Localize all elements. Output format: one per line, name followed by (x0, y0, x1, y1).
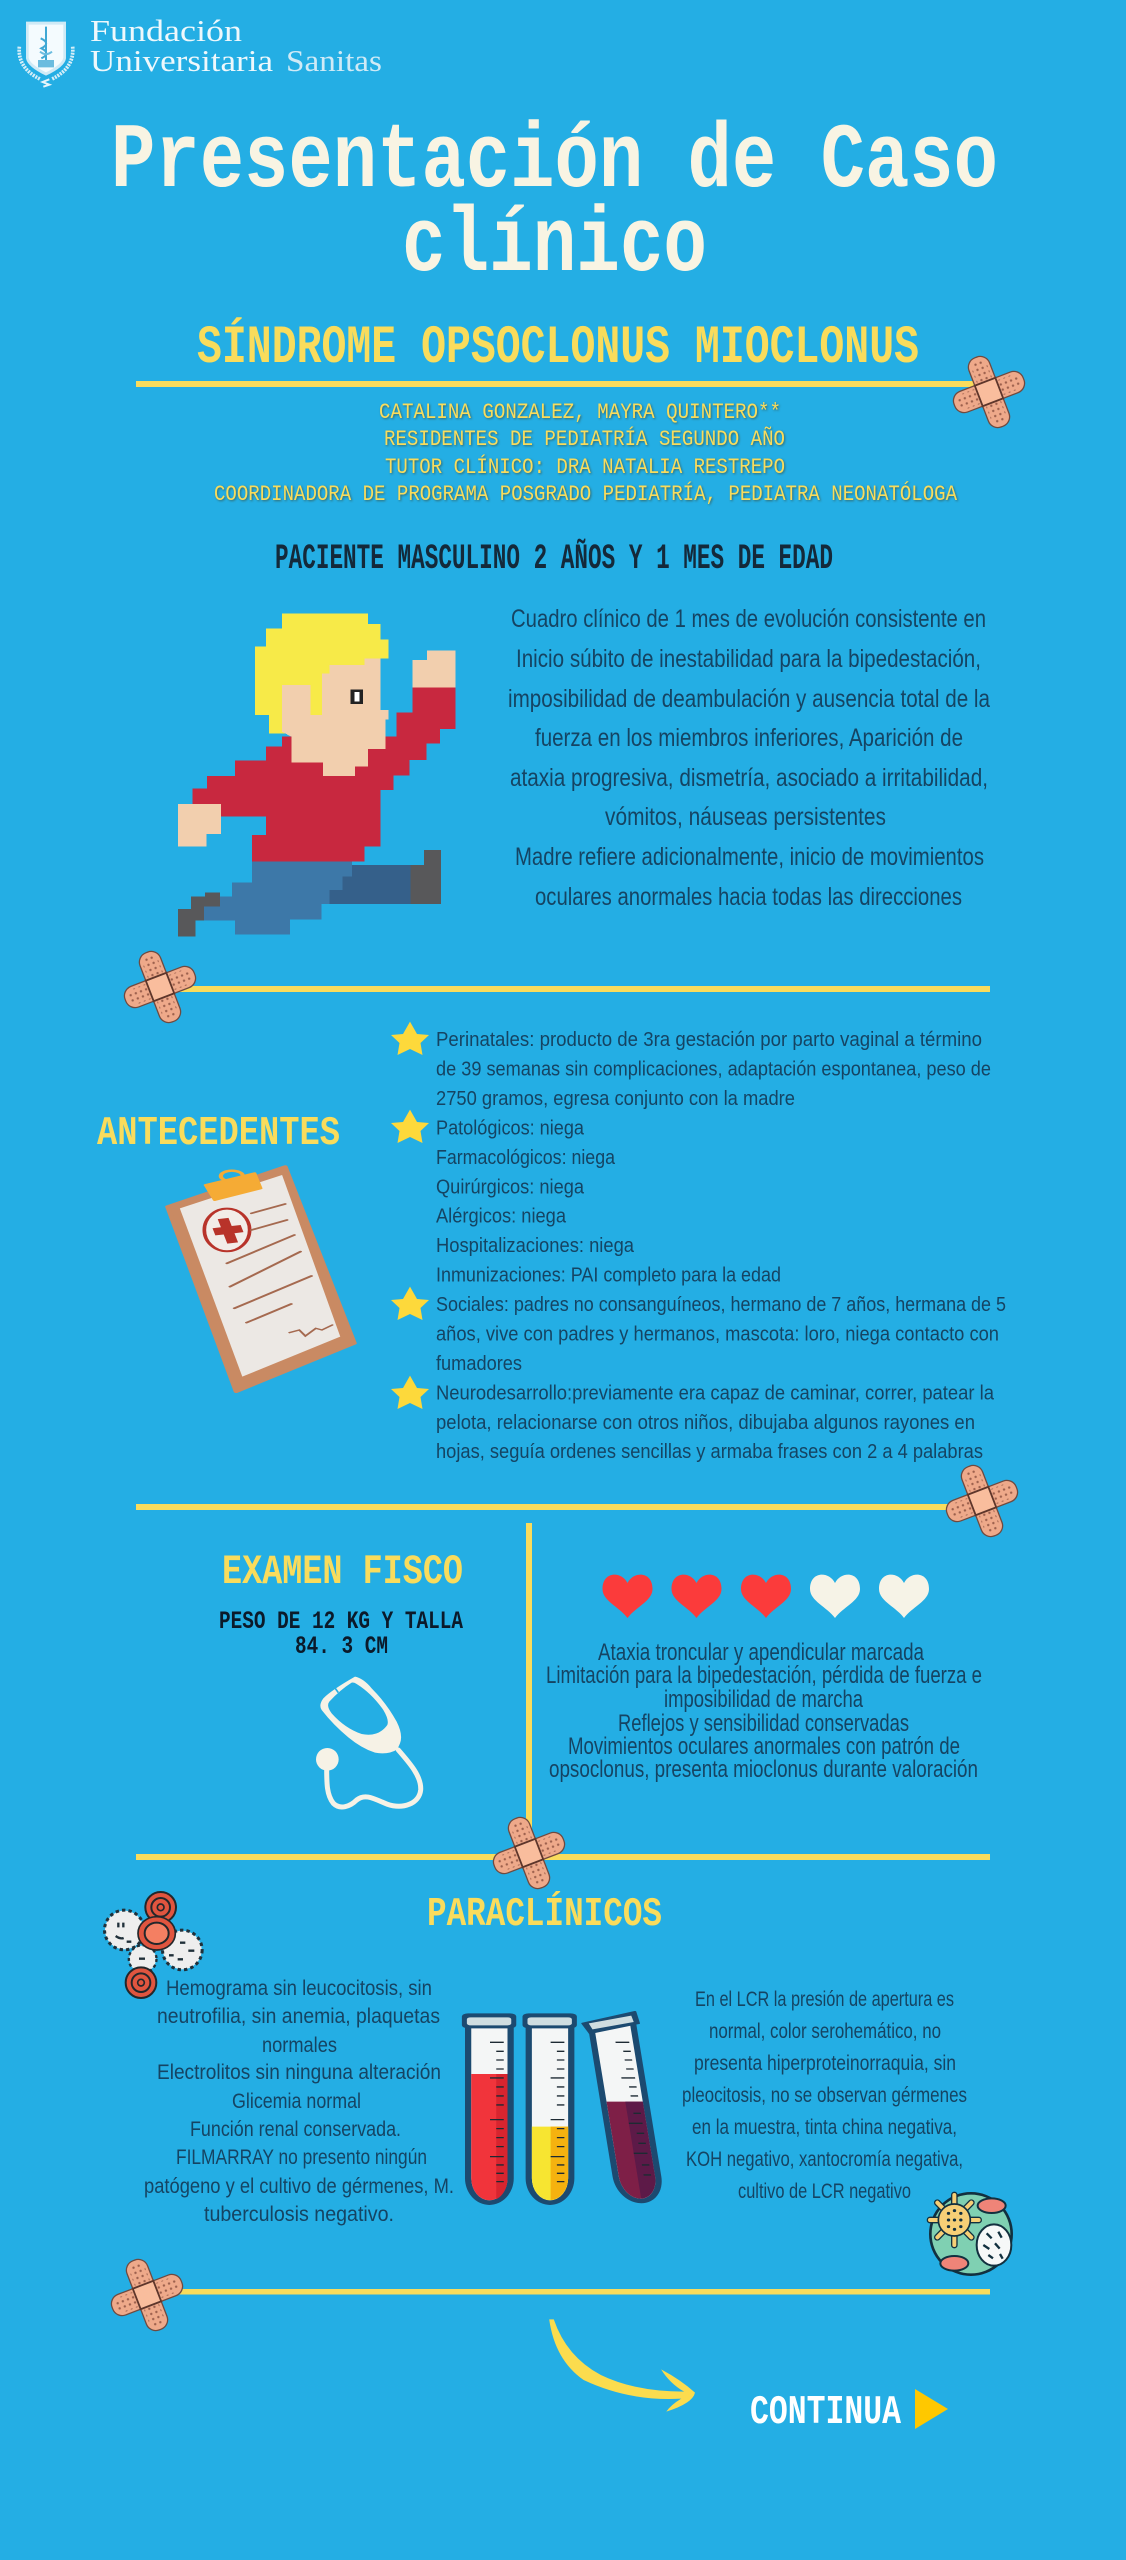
title (111, 109, 998, 298)
antecedentes text: de 39 semanas sin complicaciones, adaptación espontanea, peso de (436, 1058, 991, 1080)
heading: antecedentes: ANTECEDENTES (97, 1111, 340, 1157)
subtitle: SÍNDROME OPSOCLONUS MIOCLONUS (197, 317, 919, 379)
right lab results text: normal, color serohemático, no (709, 2020, 941, 2043)
patient description text: Madre refiere adicionalmente, inicio de movimientos (515, 843, 984, 871)
icon: clipboard (168, 1167, 354, 1392)
left lab results text: Electrolitos sin ninguna alteración (157, 2061, 441, 2084)
right lab results text: presenta hiperproteinorraquia, sin (694, 2052, 956, 2075)
authors: RESIDENTES DE PEDIATRÍA SEGUNDO AÑO (384, 426, 785, 452)
antecedentes text: Hospitalizaciones: niega (436, 1235, 635, 1257)
icon: germs circle (930, 2193, 1012, 2275)
right lab results text (682, 1988, 967, 2203)
right lab results text: En el LCR la presión de apertura es (695, 1988, 954, 2011)
antecedentes text: Quirúrgicos: niega (436, 1176, 585, 1198)
divider with bandage 1 (136, 344, 1037, 440)
right lab results text: en la muestra, tinta china negativa, (692, 2116, 957, 2139)
left lab results text: FILMARRAY no presento ningún (176, 2146, 427, 2169)
left lab results text: Función renal conservada. (190, 2118, 401, 2141)
left lab results text: neutrofilia, sin anemia, plaquetas (157, 2005, 440, 2028)
left lab results text (144, 1977, 454, 2226)
antecedentes text: Farmacológicos: niega (436, 1147, 616, 1169)
physical exam text: Ataxia troncular y apendicular marcada (598, 1639, 925, 1666)
red cells (126, 1892, 176, 1998)
patient description text: Cuadro clínico de 1 mes de evolución consistente en (511, 605, 986, 633)
icon: bandage (99, 2247, 195, 2343)
physical exam text: Movimientos oculares anormales con patrón de (568, 1733, 960, 1760)
patient description text (508, 605, 990, 911)
icon: bandage (934, 1453, 1030, 1549)
list: antecedentes (391, 1022, 1006, 1463)
icon: bandage (481, 1805, 577, 1901)
logo text (90, 13, 382, 78)
icon: stethoscope (316, 1677, 421, 1807)
patient description text: vómitos, náuseas persistentes (605, 803, 886, 831)
antecedentes text: pelota, relacionarse con otros niños, dibujaba algunos rayones en (436, 1412, 975, 1434)
vertical divider (526, 1523, 532, 1858)
weight and height: 84. 3 CM (295, 1632, 388, 1661)
authors (214, 400, 958, 507)
arrow (549, 2319, 695, 2412)
antecedentes text (436, 1029, 1006, 1463)
white cells (105, 1911, 202, 1972)
antecedentes text: Patológicos: niega (436, 1117, 585, 1139)
tube: dark red (582, 2012, 666, 2203)
icon: star 3 (391, 1287, 429, 1320)
patient description text: fuerza en los miembros inferiores, Aparición de (535, 724, 963, 752)
patient description text: Inicio súbito de inestabilidad para la bipedestación, (516, 645, 981, 673)
logo text: Sanitas (286, 43, 382, 78)
left lab results text: tuberculosis negativo. (204, 2203, 394, 2226)
divider with bandage 5 (99, 2247, 990, 2343)
physical exam text: Limitación para la bipedestación, pérdida de fuerza e (546, 1662, 982, 1689)
antecedentes text: Perinatales: producto de 3ra gestación por parto vaginal a término (436, 1029, 982, 1051)
icon: university shield (19, 22, 73, 87)
left lab results text: patógeno y el cultivo de gérmenes, M. (144, 2175, 454, 2198)
patient heading: PACIENTE MASCULINO 2 AÑOS Y 1 MES DE EDAD (275, 539, 833, 579)
icon: bandage (941, 344, 1037, 440)
authors: TUTOR CLÍNICO: DRA NATALIA RESTREPO (385, 454, 785, 480)
logo text: Fundación (90, 13, 243, 48)
patient description text: ataxia progresiva, dismetría, asociado a irritabilidad, (510, 764, 988, 792)
icon: star 2 (391, 1110, 429, 1143)
antecedentes text: Inmunizaciones: PAI completo para la edad (436, 1265, 781, 1287)
patient description text: imposibilidad de deambulación y ausencia total de la (508, 685, 990, 713)
icon: pixel boy running (178, 613, 455, 937)
antecedentes text: Alérgicos: niega (436, 1206, 567, 1228)
icon: test tubes (462, 2012, 666, 2205)
divider with bandage 4 (136, 1805, 990, 1901)
icon: blood cells (105, 1892, 202, 1998)
divider with bandage 3 (136, 1453, 1030, 1549)
weight and height: PESO DE 12 KG Y TALLA (219, 1607, 463, 1636)
virus (930, 2195, 979, 2245)
right lab results text: pleocitosis, no se observan gérmenes (682, 2084, 967, 2107)
logo text: Universitaria (90, 43, 273, 78)
divider with bandage 2 (112, 939, 990, 1035)
heading: paraclínicos: PARACLÍNICOS (427, 1891, 662, 1938)
left lab results text: normales (262, 2034, 337, 2057)
right lab results text: cultivo de LCR negativo (738, 2180, 911, 2203)
left lab results text: Hemograma sin leucocitosis, sin (166, 1977, 432, 2000)
left lab results text: Glicemia normal (232, 2090, 361, 2113)
antecedentes text: Sociales: padres no consanguíneos, hermano de 7 años, hermana de 5 (436, 1294, 1006, 1316)
weight and height (219, 1607, 463, 1661)
continue label: CONTINUA (750, 2390, 901, 2436)
antecedentes text: Neurodesarrollo:previamente era capaz de caminar, correr, patear la (436, 1382, 995, 1404)
heading: examen fisco: EXAMEN FISCO (222, 1548, 463, 1596)
tube: yellow (522, 2013, 577, 2205)
antecedentes text: años, vive con padres y hermanos, mascota: loro, niega contacto con (436, 1324, 999, 1346)
icon: heart red (741, 1575, 791, 1618)
authors: CATALINA GONZALEZ, MAYRA QUINTERO** (379, 400, 781, 425)
hearts rating (602, 1575, 929, 1618)
icon: heart white (879, 1575, 929, 1618)
icon: star 4 (391, 1376, 429, 1409)
tube: red (462, 2013, 516, 2205)
physical exam text: Reflejos y sensibilidad conservadas (618, 1710, 909, 1737)
icon: heart red (602, 1575, 652, 1618)
antecedentes text: 2750 gramos, egresa conjunto con la madre (436, 1088, 795, 1110)
icon: star 1 (391, 1022, 429, 1055)
right lab results text: KOH negativo, xantocromía negativa, (686, 2148, 963, 2171)
antecedentes text: fumadores (436, 1353, 522, 1375)
patient description text: oculares anormales hacia todas las direcciones (535, 883, 962, 911)
icon: heart white (810, 1575, 860, 1618)
antecedentes text: hojas, seguía ordenes sencillas y armaba frases con 2 a 4 palabras (436, 1441, 983, 1463)
authors: COORDINADORA DE PROGRAMA POSGRADO PEDIATRÍA, PEDIATRA NEONATÓLOGA (214, 481, 958, 507)
title: clínico (402, 193, 707, 298)
icon: heart red (672, 1575, 722, 1618)
physical exam text: opsoclonus, presenta mioclonus durante valoración (549, 1756, 978, 1783)
physical exam text (546, 1639, 982, 1783)
icon: play triangle (915, 2389, 948, 2429)
icon: bandage (112, 939, 208, 1035)
logo: Fundación Universitaria Sanitas (19, 13, 382, 87)
physical exam text: imposibilidad de marcha (664, 1686, 864, 1713)
